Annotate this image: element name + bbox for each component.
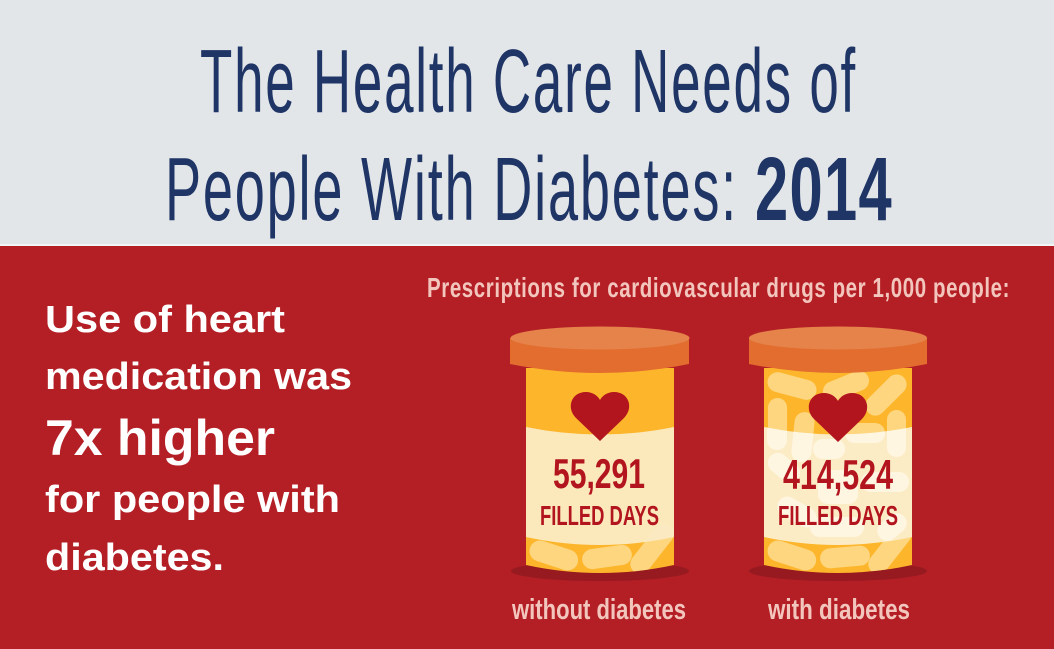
header panel xyxy=(0,0,1054,244)
statement text: 7x higher xyxy=(45,410,275,466)
red content panel xyxy=(0,244,1054,649)
icon: heart xyxy=(571,392,629,441)
statement text: for people with xyxy=(45,479,340,521)
statement text: Use of heart xyxy=(45,299,285,341)
pill bottle: with diabetes: FILLED DAYS xyxy=(778,500,898,531)
pills xyxy=(530,537,674,572)
value: 414,524 xyxy=(783,451,893,498)
bottle caption: without diabetes: without diabetes xyxy=(511,594,686,626)
icon: heart xyxy=(809,393,867,442)
pill bottle: without diabetes: FILLED DAYS xyxy=(540,500,659,531)
pill bottle: without diabetes xyxy=(510,326,690,581)
statement text: medication was xyxy=(45,356,352,398)
pills xyxy=(765,368,916,578)
statement text: diabetes. xyxy=(45,537,224,579)
bottle label xyxy=(764,427,912,545)
statement text xyxy=(45,299,352,579)
lid xyxy=(749,338,927,373)
title: 2014 xyxy=(755,140,893,240)
bottle label xyxy=(526,427,674,545)
lid xyxy=(510,338,689,373)
value: 55,291 xyxy=(553,450,645,497)
bottle caption: with diabetes: with diabetes xyxy=(767,594,910,626)
pills seen through label xyxy=(767,428,909,541)
pill bottle: with diabetes xyxy=(749,326,927,581)
title xyxy=(165,32,893,240)
